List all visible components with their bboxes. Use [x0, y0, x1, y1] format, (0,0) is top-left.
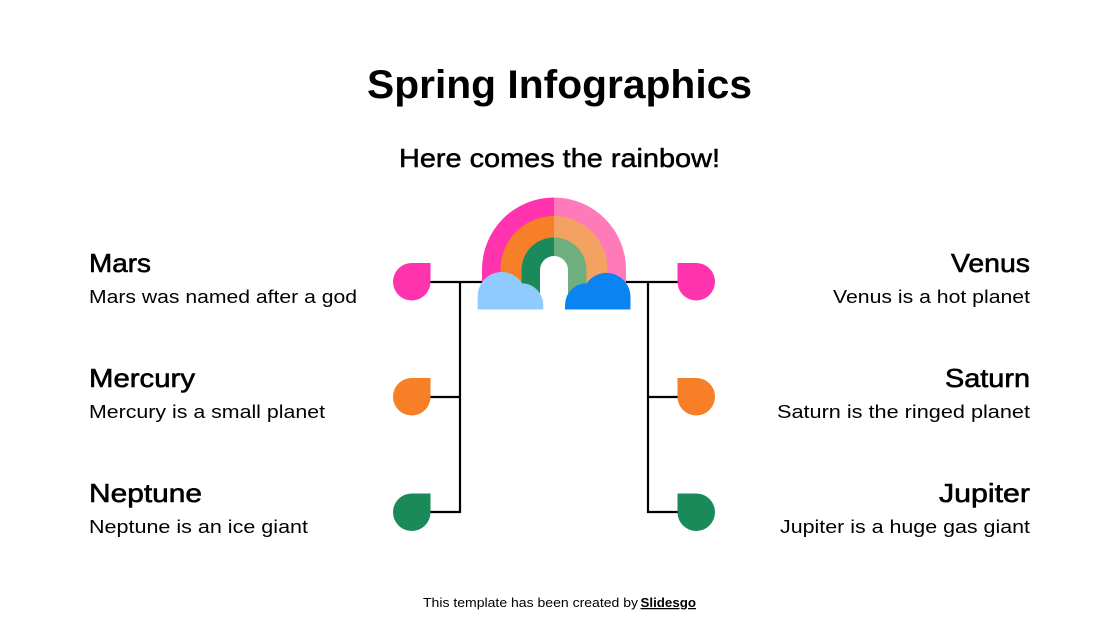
connector lines	[430, 282, 678, 512]
icon: Saturn drop	[677, 378, 715, 416]
text block: Saturn: Saturn is the ringed planet	[777, 401, 1030, 422]
text block: Venus: Venus	[951, 248, 1030, 278]
text block: Jupiter	[780, 478, 1030, 537]
text block: Neptune	[89, 478, 308, 537]
text block: Jupiter: Jupiter	[939, 478, 1030, 508]
text block: Neptune: Neptune	[89, 478, 202, 508]
title: Spring Infographics	[367, 63, 752, 107]
icon: rainbow with clouds	[478, 198, 630, 310]
icon: blue cloud	[565, 273, 630, 310]
text block: Saturn	[777, 363, 1030, 422]
icon: Mars drop	[393, 263, 431, 300]
icon: light blue cloud	[478, 272, 543, 310]
icon: Jupiter drop	[677, 494, 715, 531]
footer credit: This template has been created by	[423, 596, 639, 610]
text block: Mars: Mars was named after a god	[89, 286, 357, 307]
subtitle: Here comes the rainbow!	[399, 143, 720, 173]
text block: Saturn: Saturn	[945, 363, 1030, 393]
icon: Venus drop	[677, 263, 715, 300]
text block: Mercury	[89, 363, 325, 422]
text block: Jupiter: Jupiter is a huge gas giant	[780, 516, 1030, 537]
text block: Mars	[89, 248, 357, 307]
footer credit: Slidesgo	[640, 596, 696, 610]
icon: Mercury drop	[393, 378, 431, 415]
text block: Mars: Mars	[89, 248, 151, 278]
text block: Neptune: Neptune is an ice giant	[89, 516, 308, 537]
text block: Mercury: Mercury	[89, 363, 195, 393]
text block: Venus	[833, 248, 1030, 307]
icon: Neptune drop	[393, 494, 431, 531]
text block: Venus: Venus is a hot planet	[833, 286, 1030, 307]
text block: Mercury: Mercury is a small planet	[89, 401, 325, 422]
